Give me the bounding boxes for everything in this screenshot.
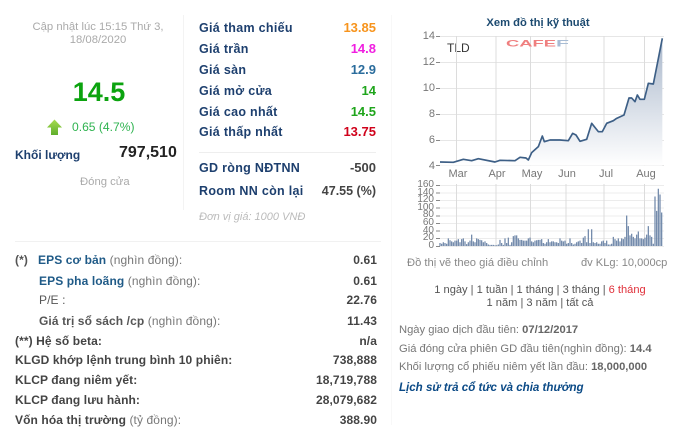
update time: Cập nhật lúc 15:15 Thứ 3, bbox=[32, 21, 164, 33]
row: listed shares: 18,719,788 bbox=[316, 373, 377, 387]
row: foreign net trade: -500 bbox=[350, 160, 376, 175]
row: ceiling price: Giá trần bbox=[199, 42, 249, 56]
row: outstanding shares: KLCP đang lưu hành: bbox=[15, 393, 140, 407]
row: high price: 14.5 bbox=[351, 104, 376, 119]
month labels: Jun bbox=[558, 168, 576, 180]
row: floor price: 12.9 bbox=[351, 62, 376, 77]
chart adjustment note: Đồ thị vẽ theo giá điều chỉnh bbox=[407, 257, 548, 269]
row: high price: Giá cao nhất bbox=[199, 105, 278, 119]
volume y-axis labels: 40 bbox=[423, 225, 434, 236]
volume bars bbox=[440, 189, 662, 246]
row: average volume bbox=[15, 353, 377, 367]
row: foreign room bbox=[199, 184, 376, 198]
chart title: Xem đồ thị kỹ thuật bbox=[486, 17, 590, 29]
logo: CAFEF: F bbox=[556, 38, 570, 48]
row: beta: n/a bbox=[359, 334, 377, 348]
volume y-axis labels: 80 bbox=[423, 209, 434, 220]
row: foreign room: Room NN còn lại bbox=[199, 184, 304, 198]
panel: chart bbox=[407, 17, 667, 269]
row: basic EPS: 0.61 bbox=[353, 253, 377, 267]
update time: 18/08/2020 bbox=[70, 34, 126, 46]
row: diluted EPS: EPS pha loãng (nghìn đồng): bbox=[39, 274, 200, 288]
price line bbox=[440, 38, 662, 162]
row: diluted EPS bbox=[39, 274, 377, 288]
update time bbox=[32, 21, 164, 46]
current price value: 14.5 bbox=[73, 77, 125, 107]
logo: CAFEF bbox=[506, 38, 570, 48]
price line chart bbox=[436, 36, 664, 166]
row: reference price: Giá tham chiếu bbox=[199, 21, 293, 35]
price y-axis labels: 4 bbox=[429, 160, 435, 172]
logo: CAFEF: CAFE bbox=[506, 38, 556, 48]
volume unit note: đv KLg: 10,000cp bbox=[581, 257, 667, 269]
month labels: Jul bbox=[599, 168, 613, 180]
row: open price: Giá mở cửa bbox=[199, 84, 272, 98]
unit note: Đơn vị giá: 1000 VNĐ bbox=[199, 211, 305, 223]
row: floor price: Giá sàn bbox=[199, 63, 246, 77]
volume label: Khối lượng bbox=[15, 148, 80, 162]
price change: 0.65 (4.7%) bbox=[72, 120, 135, 134]
row: average volume: 738,888 bbox=[333, 353, 377, 367]
price y-axis labels: 6 bbox=[429, 134, 435, 146]
row: open price bbox=[199, 83, 376, 98]
row: listed shares: KLCP đang niêm yết: bbox=[15, 373, 137, 387]
row: market cap bbox=[15, 413, 377, 427]
row: low price bbox=[199, 124, 376, 139]
volume y-axis labels bbox=[417, 179, 434, 251]
row: beta: (**) Hệ số beta: bbox=[15, 334, 102, 348]
row: P/E bbox=[39, 293, 377, 307]
row: basic EPS: (*) bbox=[15, 253, 28, 267]
row: P/E: 22.76 bbox=[346, 293, 377, 307]
row: average volume: KLGD khớp lệnh trung bình 10 phiên: bbox=[15, 353, 232, 367]
month labels: Apr bbox=[488, 168, 506, 180]
panel: time range links: 1 ngày | 1 tuần | 1 tháng | 3 tháng | 6 tháng bbox=[434, 284, 646, 296]
volume bar chart bbox=[436, 184, 664, 247]
volume value: 797,510 bbox=[119, 144, 177, 161]
volume y-axis labels: 20 bbox=[423, 232, 434, 243]
row: foreign room: 47.55 (%) bbox=[322, 184, 376, 198]
row: basic EPS: EPS cơ bản (nghìn đồng): bbox=[38, 253, 182, 267]
panel: financial indicators bbox=[15, 253, 377, 427]
price y-axis labels: 8 bbox=[429, 108, 435, 120]
row: floor price bbox=[199, 62, 376, 77]
volume y-axis labels: 100 bbox=[417, 202, 434, 213]
row: outstanding shares: 28,079,682 bbox=[316, 393, 377, 407]
row: diluted EPS: 0.61 bbox=[353, 274, 377, 288]
first listed volume: Khối lượng cổ phiếu niêm yết lần đầu: 18,000,000 bbox=[399, 361, 647, 373]
month labels: Mar bbox=[449, 168, 467, 180]
row: beta bbox=[15, 334, 377, 348]
first closing price: Giá đóng cửa phiên GD đầu tiên(nghìn đồng): 14.4 bbox=[399, 343, 652, 355]
volume y-axis labels: 0 bbox=[428, 240, 434, 251]
price area fill bbox=[440, 38, 662, 166]
session status: Đóng cửa bbox=[80, 176, 130, 188]
panel: current price bbox=[15, 21, 177, 188]
row: basic EPS bbox=[15, 253, 377, 267]
volume y-axis labels: 140 bbox=[417, 187, 434, 198]
row: open price: 14 bbox=[362, 83, 376, 98]
row: ceiling price: 14.8 bbox=[351, 41, 376, 56]
row: high price bbox=[199, 104, 376, 119]
row: market cap: Vốn hóa thị trường (tỷ đồng): bbox=[15, 413, 181, 427]
row: ceiling price bbox=[199, 41, 376, 56]
month labels: Aug bbox=[636, 168, 656, 180]
icon: up arrow bbox=[47, 120, 62, 135]
panel: listing information bbox=[399, 324, 652, 394]
panel: reference prices bbox=[199, 20, 376, 223]
row: listed shares bbox=[15, 373, 377, 387]
panel: time range links bbox=[434, 284, 646, 309]
ticker label: TLD bbox=[447, 41, 470, 55]
row: market cap: 388.90 bbox=[340, 413, 377, 427]
month labels bbox=[449, 168, 656, 180]
row: foreign net trade: GD ròng NĐTNN bbox=[199, 161, 300, 175]
row: low price: Giá thấp nhất bbox=[199, 125, 283, 139]
row: low price: 13.75 bbox=[343, 124, 376, 139]
row: foreign net trade bbox=[199, 160, 376, 175]
first trading date: Ngày giao dịch đầu tiên: 07/12/2017 bbox=[399, 324, 578, 336]
price y-axis labels: 14 bbox=[423, 30, 435, 42]
volume y-axis labels: 160 bbox=[417, 179, 434, 190]
row: reference price: 13.85 bbox=[343, 20, 376, 35]
price y-axis labels bbox=[423, 30, 435, 172]
row: book value: 11.43 bbox=[347, 314, 377, 328]
row: reference price bbox=[199, 20, 376, 35]
month labels: May bbox=[522, 168, 542, 180]
row: P/E: P/E : bbox=[39, 293, 66, 307]
volume y-axis labels: 60 bbox=[423, 217, 434, 228]
price y-axis labels: 12 bbox=[423, 56, 435, 68]
dividend history link: Lịch sử trả cổ tức và chia thưởng bbox=[399, 382, 584, 394]
row: book value bbox=[39, 314, 377, 328]
price y-axis labels: 10 bbox=[423, 82, 435, 94]
row: outstanding shares bbox=[15, 393, 377, 407]
row: book value: Giá trị sổ sách /cp (nghìn đồng): bbox=[39, 314, 220, 328]
panel: time range links: 1 năm | 3 năm | tất cả bbox=[487, 297, 593, 309]
volume y-axis labels: 120 bbox=[417, 194, 434, 205]
